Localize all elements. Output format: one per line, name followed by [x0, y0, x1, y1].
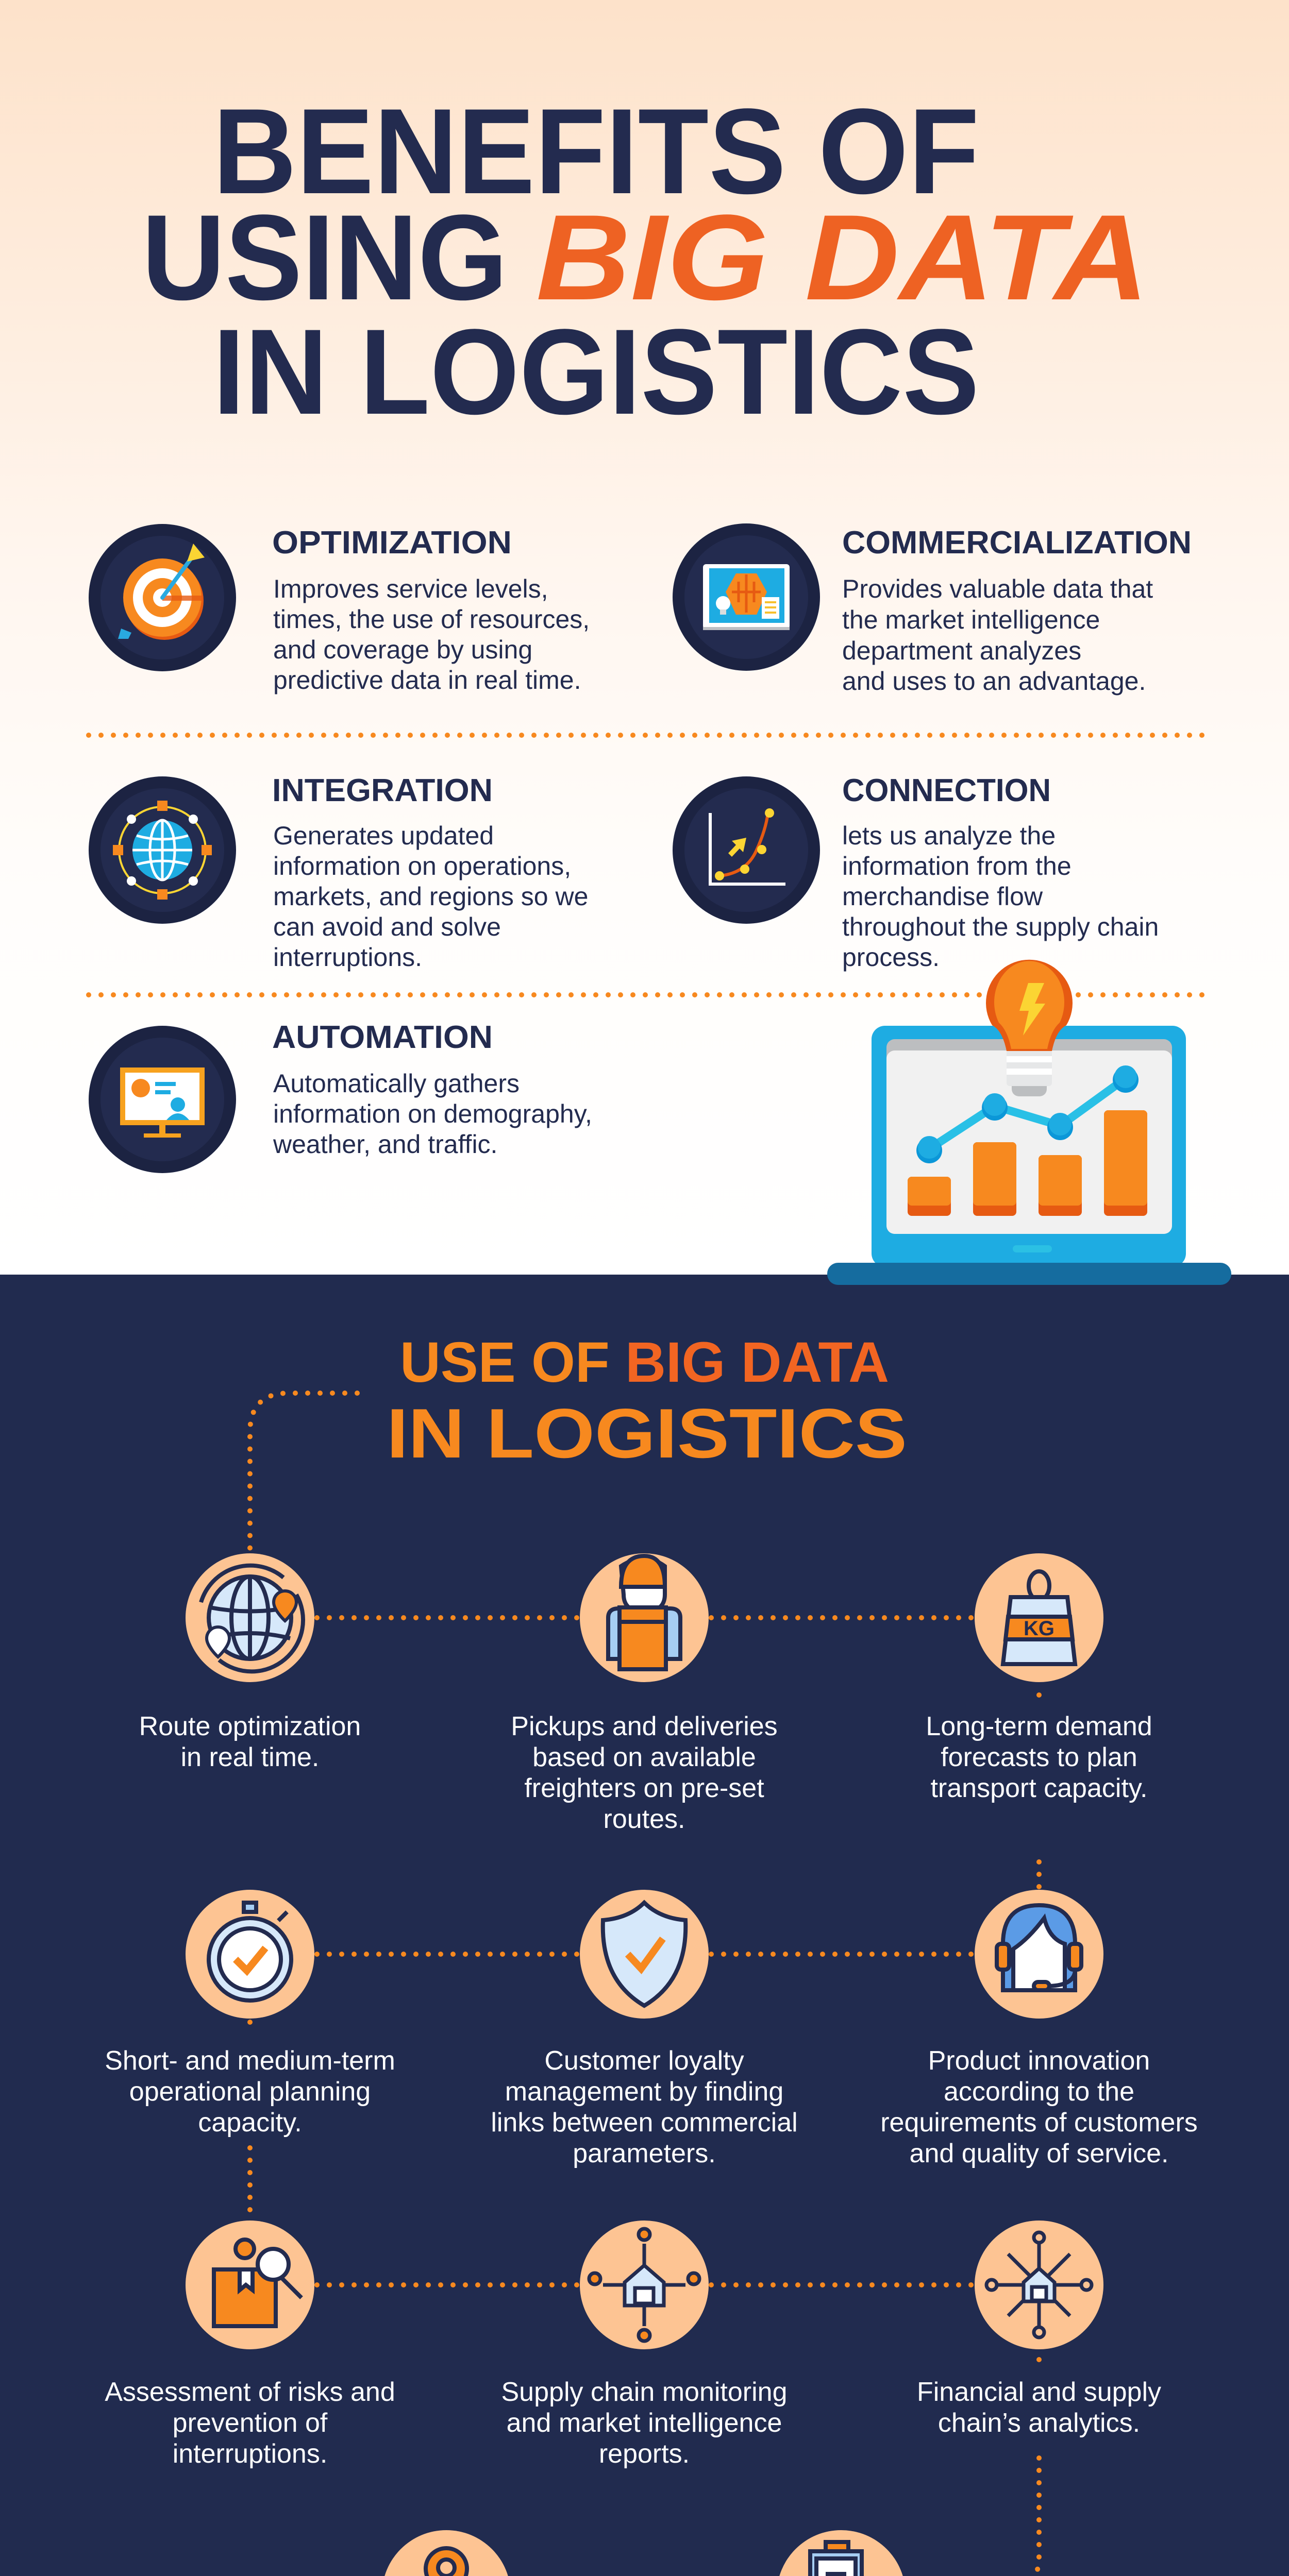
label: and market intelligence — [507, 2408, 782, 2438]
item: statistics on pollution — [712, 2530, 970, 2576]
item: supply chain monitoring — [501, 2221, 788, 2469]
illustration: laptop with chart and bulb — [827, 960, 1231, 1285]
text: optimization: times, the use of resources, — [273, 605, 590, 634]
icon: KG weight — [975, 1553, 1103, 1682]
icon: box and magnifier — [186, 2221, 314, 2349]
text: optimization: predictive data in real time. — [273, 666, 581, 694]
text: optimization: and coverage by using — [273, 635, 532, 664]
label: capacity. — [198, 2108, 302, 2138]
dividers — [89, 735, 1206, 995]
text: connection: process. — [842, 943, 940, 972]
connectors: dotted path — [250, 1393, 1039, 2576]
label: requirements of customers — [880, 2108, 1198, 2138]
icon: growth chart — [673, 776, 820, 924]
label: management by finding — [505, 2077, 783, 2107]
icon: map pin — [382, 2530, 511, 2576]
label: and quality of service. — [910, 2139, 1168, 2168]
icon: clipboard check — [777, 2530, 906, 2576]
label: in real time. — [181, 1742, 319, 1772]
text: commercialization: and uses to an advantage. — [842, 667, 1146, 696]
text: automation: weather, and traffic. — [273, 1130, 497, 1159]
panel: connection — [673, 773, 1159, 972]
icon: tablet brain — [673, 523, 820, 671]
bars — [908, 1110, 1147, 1216]
text: integration: Generates updated — [273, 821, 494, 850]
text: integration: markets, and regions so we — [273, 882, 588, 911]
icon: hub — [975, 2221, 1103, 2349]
label: transport capacity. — [930, 1773, 1148, 1803]
label: according to the — [944, 2077, 1134, 2107]
item: route optimization — [139, 1553, 361, 1772]
title: BENEFITS OF — [213, 83, 979, 219]
heading: use of big data in logistics: IN LOGISTICS — [387, 1394, 907, 1472]
icon: monitor person — [89, 1026, 236, 1173]
label: Long-term demand — [926, 1711, 1152, 1741]
heading: optimization: OPTIMIZATION — [272, 525, 512, 561]
text: automation: Automatically gathers — [273, 1069, 520, 1098]
label: forecasts to plan — [941, 1742, 1137, 1772]
heading: use of big data in logistics — [387, 1331, 907, 1472]
icon: delivery man — [580, 1553, 709, 1682]
label: interruptions. — [173, 2439, 327, 2469]
text: connection: lets us analyze the — [842, 821, 1056, 850]
text: connection: merchandise flow — [842, 882, 1043, 911]
label: Customer loyalty — [544, 2046, 744, 2076]
icon: KG weight: KG — [1024, 1617, 1054, 1640]
label: parameters. — [573, 2139, 716, 2168]
text: connection: information from the — [842, 852, 1072, 880]
icon: globe — [186, 1553, 314, 1682]
title — [142, 83, 1149, 440]
icon: network people — [580, 2221, 709, 2349]
bulb — [986, 960, 1073, 1096]
title: USING — [142, 190, 508, 326]
panel: commercialization — [673, 523, 1192, 696]
item: financial analytics — [917, 2221, 1161, 2438]
heading: connection: CONNECTION — [842, 773, 1051, 808]
label: operational planning — [129, 2077, 371, 2107]
text: integration: can avoid and solve — [273, 912, 501, 941]
label: Route optimization — [139, 1711, 361, 1741]
label: based on available — [532, 1742, 756, 1772]
line — [916, 1065, 1139, 1163]
heading: use of big data in logistics: USE OF BIG DATA — [400, 1331, 889, 1394]
label: Supply chain monitoring — [501, 2377, 788, 2407]
panel: integration — [89, 773, 588, 972]
item: verification of delivery locations — [316, 2530, 577, 2576]
text: integration: information on operations, — [273, 852, 571, 880]
text: integration: interruptions. — [273, 943, 422, 972]
label: routes. — [604, 1804, 685, 1834]
text: commercialization: Provides valuable data that — [842, 574, 1153, 603]
heading: commercialization: COMMERCIALIZATION — [842, 525, 1192, 561]
title: IN LOGISTICS — [213, 304, 979, 440]
item: customer loyalty — [491, 1890, 798, 2168]
panel: automation — [89, 1020, 592, 1173]
item: pickups and deliveries — [511, 1553, 778, 1834]
label: Financial and supply — [917, 2377, 1161, 2407]
icon: stopwatch — [186, 1890, 314, 2019]
text: connection: throughout the supply chain — [842, 912, 1159, 941]
label: reports. — [599, 2439, 690, 2469]
item: risk assessment — [105, 2221, 395, 2469]
label: Pickups and deliveries — [511, 1711, 778, 1741]
heading: automation: AUTOMATION — [272, 1020, 493, 1055]
item: long-term demand — [926, 1553, 1152, 1803]
icon: shield — [580, 1890, 709, 2019]
label: Assessment of risks and — [105, 2377, 395, 2407]
label: freighters on pre-set — [524, 1773, 764, 1803]
label: chain’s analytics. — [938, 2408, 1140, 2438]
label: links between commercial — [491, 2108, 798, 2138]
text: optimization: Improves service levels, — [273, 574, 548, 603]
item: product innovation — [880, 1890, 1198, 2168]
heading: integration: INTEGRATION — [272, 773, 493, 808]
text: commercialization: the market intelligence — [842, 605, 1100, 634]
icon: globe network — [89, 776, 236, 924]
label: Product innovation — [928, 2046, 1150, 2076]
label: Short- and medium-term — [105, 2046, 395, 2076]
icon: target — [89, 524, 236, 671]
text: automation: information on demography, — [273, 1099, 592, 1128]
panel: optimization — [89, 524, 590, 694]
label: prevention of — [173, 2408, 328, 2438]
text: commercialization: department analyzes — [842, 636, 1081, 665]
title: BIG DATA — [536, 190, 1149, 326]
item: operational planning — [105, 1890, 395, 2138]
icon: headset agent — [975, 1890, 1103, 2019]
